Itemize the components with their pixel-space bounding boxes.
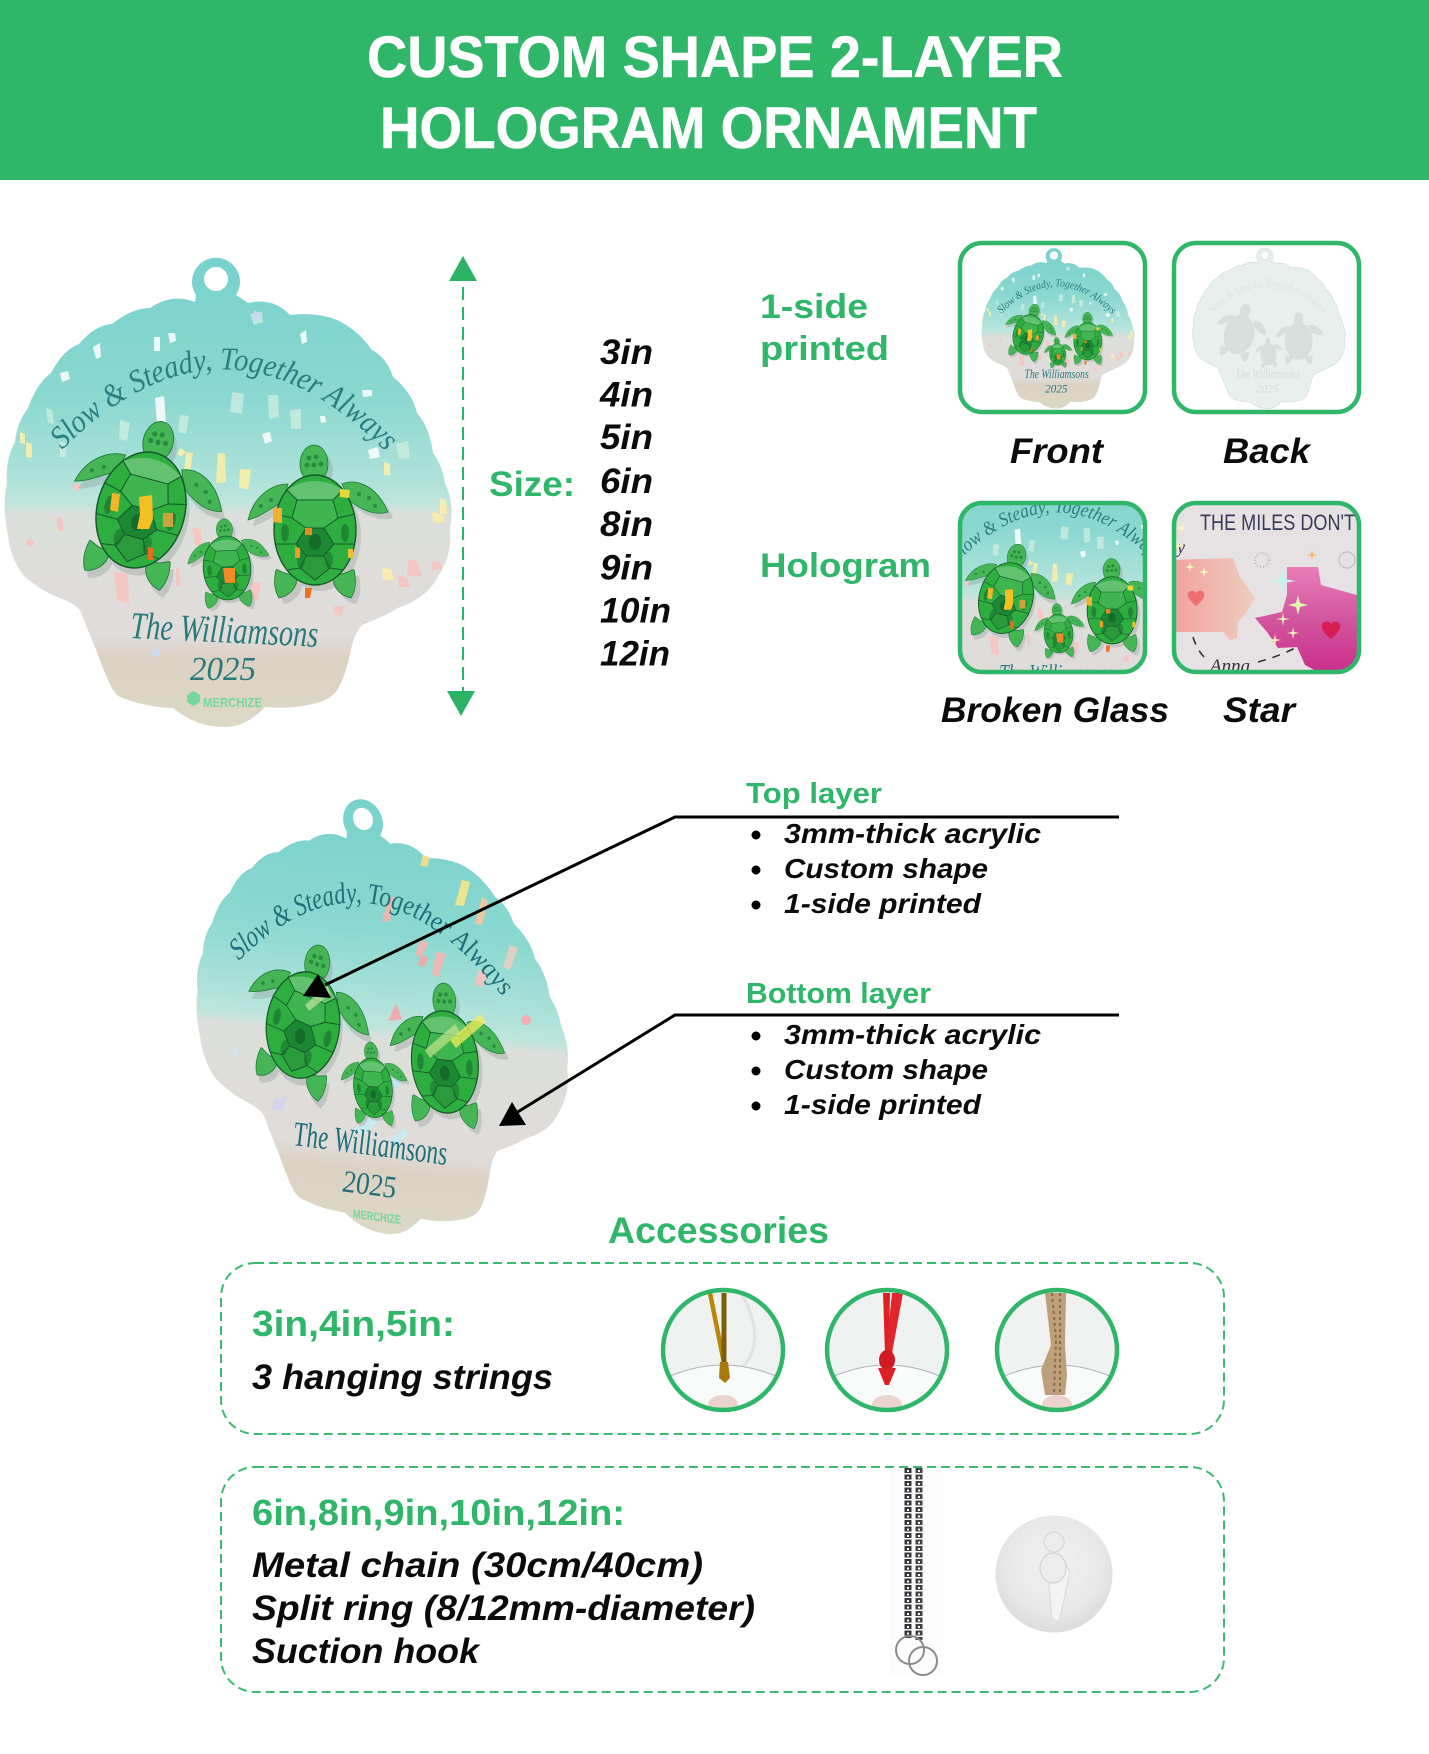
tilted ornament with layers: 2025 [342, 1164, 396, 1206]
thumbnail: front: The Williamsons [1024, 366, 1089, 381]
label: 1-side printed: 1-side [760, 288, 868, 326]
tilted ornament with layers [196, 799, 568, 1234]
captions: front and back: Front [1010, 432, 1104, 471]
thumbnail: front [958, 240, 1148, 414]
size list: 3in [600, 333, 653, 372]
thumbnail: back: The Williamsons [1235, 366, 1300, 381]
callout: bottom layer: Bottom layer [746, 978, 931, 1010]
title: CUSTOM SHAPE 2-LAYER [367, 25, 1063, 90]
thumbnail: front: 2025 [1045, 383, 1068, 396]
title [367, 25, 1063, 161]
tilted ornament with layers: The Williamsons [294, 1114, 447, 1174]
thumbnail: star: y [1175, 537, 1185, 557]
size list: 6in [600, 462, 653, 501]
callout: top layer: Top layer [746, 778, 882, 810]
callout: bottom layer: 3mm-thick acrylic [784, 1019, 1041, 1050]
size label: Size: [489, 465, 575, 504]
large ornament photo: 2025 [190, 651, 256, 688]
size list: 9in [600, 548, 653, 588]
icon: metal chain [890, 1468, 943, 1676]
thumbnail: back: Slow & Steady, Together Always [1208, 280, 1326, 314]
callout arrow: top layer [303, 817, 1119, 998]
thumbnail: back [1172, 240, 1362, 414]
label: 1-side printed: printed [760, 330, 889, 368]
large ornament photo: The Williamsons [130, 605, 319, 656]
callout: bottom layer: Custom shape [784, 1054, 988, 1085]
large ornament photo: MERCHIZE [203, 695, 262, 710]
large ornament photo: Slow & Steady, Together Always [52, 348, 396, 450]
callout: top layer [746, 778, 1041, 919]
thumbnail: front: Slow & Steady, Together Always [998, 279, 1116, 314]
thumbnail: broken glass: Slow & Steady, Together Always [962, 505, 1143, 556]
label: hologram: Hologram [760, 547, 931, 585]
size list: 4in [599, 376, 653, 414]
callout: top layer: 1-side printed [784, 888, 982, 919]
tilted ornament with layers: MERCHIZE [353, 1208, 401, 1227]
size list [599, 333, 671, 674]
captions: broken glass and star: Star [1223, 691, 1298, 730]
captions: broken glass and star [941, 691, 1298, 730]
description: strings: 3 hanging strings [252, 1358, 553, 1397]
captions: front and back: Back [1223, 432, 1312, 471]
thumbnail: star [1170, 503, 1364, 677]
icon: jute twine [997, 1290, 1117, 1420]
description: hardware: Metal chain (30cm/40cm) [252, 1546, 703, 1585]
header banner [0, 0, 1429, 180]
sizes: small: 3in,4in,5in: [252, 1303, 455, 1344]
captions: broken glass and star: Broken Glass [941, 691, 1169, 730]
icon: suction hook [996, 1516, 1112, 1632]
icon: red ribbon [827, 1290, 947, 1420]
captions: front and back [1010, 432, 1312, 471]
title: HOLOGRAM ORNAMENT [380, 96, 1037, 161]
callout: top layer: 3mm-thick acrylic [784, 818, 1041, 849]
callout: bottom layer: 1-side printed [784, 1089, 982, 1120]
size list: 12in [600, 634, 670, 674]
sizes: large: 6in,8in,9in,10in,12in: [252, 1492, 625, 1533]
size list: 5in [600, 418, 653, 457]
callout arrow: bottom layer [499, 1015, 1119, 1126]
thumbnail: broken glass [958, 500, 1148, 674]
accessories heading: Accessories [608, 1210, 829, 1251]
description: hardware [252, 1546, 755, 1671]
large ornament photo [4, 258, 452, 727]
label: 1-side printed [760, 288, 889, 368]
size list: 8in [600, 505, 653, 544]
thumbnail: broken glass: The Williamsons [999, 660, 1114, 686]
size arrow [447, 256, 477, 716]
thumbnail: star: Anna [1208, 656, 1250, 677]
icon: gold string [663, 1290, 783, 1420]
panel: chain, ring, hook [221, 1467, 1224, 1692]
thumbnail: back: 2025 [1256, 383, 1279, 396]
callout: top layer: Custom shape [784, 853, 988, 884]
tilted ornament with layers: Slow & Steady, Together Always [230, 882, 511, 994]
description: hardware: Split ring (8/12mm-diameter) [252, 1589, 755, 1628]
description: hardware: Suction hook [252, 1632, 481, 1671]
thumbnail: star: THE MILES DON'T [1200, 510, 1355, 535]
callout: bottom layer [746, 978, 1041, 1120]
size list: 10in [600, 592, 671, 630]
panel: hanging strings [221, 1263, 1224, 1434]
